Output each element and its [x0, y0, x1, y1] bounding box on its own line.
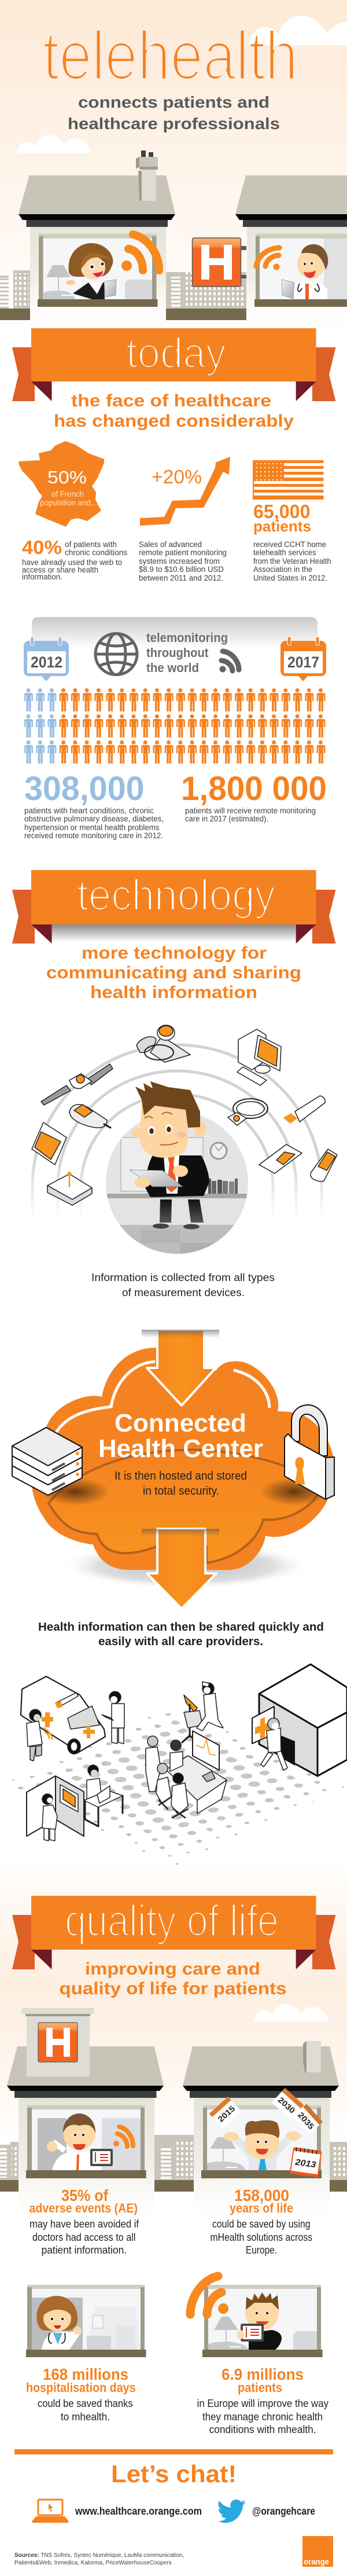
- sill: [201, 2170, 322, 2178]
- panel: lower city and ground: [0, 2135, 347, 2192]
- heading: quality of life: quality of life: [65, 1896, 279, 1946]
- lamp and sofa: [208, 2317, 317, 2350]
- calendar page 2030: 2030: [276, 2095, 297, 2115]
- caption on map: population and...: [40, 498, 97, 507]
- icon: calendar 2017: 2017: [287, 654, 319, 671]
- subheading: improving care: improving care and: [85, 1959, 260, 1979]
- stat text: mHealth solutions across: [211, 2231, 312, 2243]
- subheading: face of healthcare: [54, 391, 294, 431]
- stat text: systems increased from: [139, 557, 220, 566]
- sill: [38, 299, 157, 307]
- cloud front highlight: [49, 1450, 322, 1563]
- heading: telemonitoring: telemonitoring: [146, 630, 228, 645]
- stat: 6.9 millions: [222, 2365, 304, 2395]
- sill: [254, 299, 347, 307]
- panel: telemonitoring header: [24, 617, 326, 681]
- stat text: could be saved thanks: [38, 2397, 133, 2409]
- stat text: United States in 2012.: [253, 574, 327, 582]
- stat text: patients with heart conditions, chronic: [24, 806, 154, 815]
- stat text: [185, 806, 316, 823]
- roof with chimney: [183, 2041, 339, 2098]
- doctor: [282, 238, 347, 299]
- stat text: conditions with mhealth.: [209, 2423, 316, 2435]
- stat: 308,000: 308,000: [24, 770, 145, 808]
- woman with tablet: [66, 243, 116, 299]
- stat: 168 millions: 168 millions: [43, 2365, 128, 2383]
- sill: [26, 2350, 146, 2357]
- stat: US patients: [253, 460, 331, 582]
- heading: connected health center: [98, 1409, 263, 1463]
- stat text: hypertension or mental health problems: [24, 823, 160, 832]
- cloud white contour: [56, 1362, 270, 1433]
- map of France: [19, 441, 104, 527]
- device: usb key: [284, 1096, 325, 1123]
- stat text: doctors had access to all: [32, 2231, 135, 2243]
- subheading: more technology: more technology for: [82, 944, 267, 963]
- sill: [26, 2170, 146, 2178]
- meeting table with monitor: [166, 1731, 227, 1814]
- ribbon: technology: [12, 870, 335, 944]
- stat: 6.9 millions: patients: [238, 2380, 282, 2395]
- footer divider bar: [14, 2449, 333, 2454]
- doctor at booth: [42, 1794, 57, 1841]
- heading: today: today: [126, 330, 226, 377]
- illustration: care providers scene: [0, 1664, 347, 1867]
- stat: 158,000 years: [230, 2186, 293, 2215]
- stat text: patient information.: [42, 2244, 127, 2256]
- man with tablet: [130, 1081, 209, 1230]
- subtitle: [68, 93, 280, 133]
- roof: [235, 175, 347, 227]
- team at meeting: [146, 1736, 188, 1818]
- icon: rss signal: [113, 2127, 133, 2146]
- icon: rss signal small: [256, 248, 280, 270]
- stat text: obstructive pulmonary disease, diabetes,: [24, 814, 164, 823]
- caption: shared with care providers: easily with all care providers.: [98, 1635, 263, 1648]
- heading: connected health center: Health Center: [98, 1434, 263, 1463]
- subheading: face of healthcare: the face of healthcare: [71, 391, 271, 410]
- house: years of life stat: [183, 2041, 339, 2256]
- calendar page 2030: [272, 2088, 304, 2120]
- caption on map: of French: [51, 489, 84, 498]
- screen booth: [27, 1776, 84, 1836]
- panel: hospitalisation days: [26, 2285, 146, 2423]
- house: hospital stat: [7, 2008, 164, 2256]
- calendar page 2015: 2015: [216, 2104, 237, 2124]
- icon: rss signal: [121, 234, 159, 271]
- stat text: received remote monitoring care in 2012.: [24, 831, 163, 840]
- arrow chart: [140, 457, 230, 526]
- icon: hospital sign: [192, 238, 246, 287]
- ribbon: today: [12, 328, 335, 401]
- stat text: $8.9 to $10.6 billion USD: [139, 565, 224, 574]
- stat text: patients will receive remote monitoring: [185, 806, 316, 815]
- device: mobile phone: [259, 1144, 302, 1173]
- device: glucose meter: [69, 1104, 110, 1128]
- desk calendar 2013: 2013: [294, 2157, 317, 2170]
- wall: [19, 2098, 154, 2226]
- wall: [194, 2098, 330, 2226]
- figure 50%: 50%: [47, 467, 87, 487]
- panel: hero header: [17, 16, 347, 153]
- window: [256, 234, 347, 299]
- icon: calendar 2012: [24, 637, 69, 681]
- diagram: devices around a man: [32, 1025, 337, 1256]
- arrow down out: [142, 1529, 219, 1609]
- stat text: [139, 540, 227, 582]
- doctor with tablet: [47, 2113, 113, 2170]
- nurse with cart: [182, 1682, 223, 1742]
- cloud text: [115, 1470, 247, 1498]
- stat text: may have been avoided if: [29, 2218, 139, 2230]
- stat: adverse events: 35% of: [61, 2186, 109, 2204]
- logo: orange: orange: [304, 2557, 329, 2566]
- stat: 168 millions: [26, 2365, 136, 2395]
- subheading: more technology: health information: [90, 983, 257, 1002]
- office furniture: [87, 2307, 141, 2350]
- figure 65,000 patients: [253, 501, 311, 535]
- floor dot pattern: [0, 1705, 347, 1867]
- lamp and sofa: [43, 265, 152, 299]
- hospital tower: [22, 2008, 94, 2076]
- caption: information collected: [91, 1271, 275, 1298]
- figure 40%: 40%: [22, 537, 62, 558]
- twitter handle: @orangehcare: [252, 2505, 315, 2517]
- heading: let's chat: Let’s chat!: [111, 2460, 237, 2487]
- stat text: could be saved by using: [212, 2218, 310, 2230]
- heading: connected health center: Connected: [115, 1409, 246, 1437]
- cloud lower right: [253, 2004, 328, 2021]
- subheading: improving care: [59, 1959, 287, 1998]
- stat text: from the Veteran Health: [253, 557, 331, 566]
- icon: laptop: [32, 2500, 69, 2523]
- subheading: more technology: [46, 944, 301, 1002]
- cloud text: in total security.: [143, 1485, 219, 1498]
- device: tablet on cradle: [32, 1122, 67, 1165]
- ambulance: [21, 1676, 105, 1754]
- stat: 158,000 years: 158,000: [234, 2186, 289, 2204]
- calendar page 2015: [209, 2097, 241, 2129]
- calendar page 2035: [293, 2104, 323, 2134]
- subheading: face of healthcare: has changed considerably: [54, 412, 294, 431]
- subheading: improving care: quality of life for patients: [59, 1979, 287, 1998]
- stat text: access or share health: [22, 566, 98, 574]
- icon: calendar 2017: [280, 637, 326, 681]
- subtitle: healthcare professionals: [68, 115, 280, 133]
- icon: twitter bird: [218, 2500, 246, 2523]
- device: ecg necklace: [228, 1099, 268, 1125]
- cloud text: It is then hosted and stored: [115, 1470, 247, 1483]
- office circle: [106, 1111, 248, 1256]
- icon: globe: [95, 633, 137, 675]
- wall: [247, 227, 347, 326]
- stat text: [211, 2218, 312, 2256]
- house: doctor office: [235, 175, 347, 307]
- icon: US flag: [253, 460, 324, 500]
- stat: 308,000: [24, 770, 164, 840]
- device: blood pressure cuff: [136, 1025, 190, 1062]
- stat: adverse events: adverse events (AE): [29, 2201, 138, 2215]
- doctor at desk: [84, 1765, 123, 1826]
- lamp and sofa: [207, 2137, 246, 2170]
- wall: [30, 227, 166, 326]
- heading: telemonitoring: throughout: [146, 645, 209, 660]
- stat text: [24, 806, 164, 840]
- ribbon: quality of life: [12, 1896, 335, 1969]
- stat text: [29, 2218, 139, 2256]
- walking doctor: [261, 1718, 287, 1770]
- caption: information collected: Information is collected from all types: [91, 1271, 275, 1283]
- pictogram: people grid: [24, 688, 328, 764]
- stat: 1,800 000: 1,800 000: [181, 770, 327, 808]
- device: desktop computer: [237, 1029, 281, 1085]
- stat text: in Europe will improve the way: [197, 2397, 329, 2409]
- panel: 6.9 million patients: [190, 2276, 329, 2435]
- cloud left: [17, 135, 91, 153]
- stat text: received CCHT home: [253, 540, 326, 549]
- device: wireless router: [47, 1172, 92, 1205]
- woman at ambulance: [27, 1709, 52, 1761]
- subheading: more technology: communicating and sharing: [46, 963, 301, 982]
- logo: orange: [302, 2536, 333, 2567]
- panel: city and ground strip: [0, 270, 246, 320]
- icon: rss gray: [220, 651, 239, 673]
- arrow down in: [142, 1330, 219, 1406]
- heading: telemonitoring: the world: [146, 660, 199, 675]
- paramedic with laptop: [102, 1691, 124, 1744]
- stat text: [197, 2397, 329, 2435]
- stat: France 50%: [19, 441, 127, 581]
- man with tablet: [237, 2292, 282, 2350]
- hospital building: [252, 1664, 347, 1776]
- website link: www.healthcare.orange.com: [75, 2505, 202, 2517]
- window: [27, 2105, 145, 2170]
- stat: 158,000 years: years of life: [230, 2201, 293, 2215]
- figure +20%: +20%: [152, 466, 202, 487]
- figure 65,000 patients: 65,000: [253, 501, 310, 522]
- stat text: to mhealth.: [61, 2410, 110, 2423]
- stat text: chronic conditions: [65, 548, 127, 557]
- stat: adverse events: [29, 2186, 138, 2215]
- window: [203, 2105, 321, 2170]
- happy man arms raised: [224, 2120, 301, 2170]
- calendar page 2035: 2035: [296, 2110, 316, 2131]
- stat text: Sales of advanced: [139, 540, 202, 549]
- figure 65,000 patients: patients: [253, 518, 311, 535]
- caption: shared with care providers: [38, 1621, 324, 1648]
- caption: shared with care providers: Health information can then be shared quickly and: [38, 1621, 324, 1634]
- icon: hospital sign: [38, 2023, 77, 2062]
- stat text: [38, 2397, 133, 2423]
- woman doctor: [36, 2296, 82, 2350]
- device: smartphone: [311, 1149, 337, 1181]
- window: [204, 2285, 321, 2350]
- window: [39, 234, 156, 299]
- roof: [7, 2046, 164, 2098]
- stat text: [22, 540, 127, 581]
- stat text: care in 2017 (estimated).: [185, 814, 268, 823]
- stat text: Association in the: [253, 565, 312, 574]
- stat text: between 2011 and 2012.: [139, 574, 223, 582]
- caption: information collected: of measurement devices.: [122, 1286, 245, 1298]
- stat text: [253, 540, 331, 582]
- chimney: [136, 151, 158, 170]
- sources: [14, 2552, 184, 2566]
- heading: technology: technology: [77, 871, 275, 919]
- device: wrist monitor: [41, 1064, 113, 1105]
- stat text: they manage chronic health: [202, 2410, 323, 2423]
- house: patient home: [19, 151, 175, 307]
- signal arcs: [32, 1045, 322, 1219]
- stat: sales +20%: [139, 457, 230, 582]
- desk calendar 2013: [290, 2147, 322, 2177]
- stat text: Europe.: [246, 2244, 277, 2256]
- ground shadow: [60, 1543, 312, 1589]
- subtitle: connects patients and: [78, 93, 270, 111]
- stat: 168 millions: hospitalisation days: [26, 2380, 136, 2395]
- icon: calendar 2012: 2012: [31, 654, 62, 671]
- stat text: remote patient monitoring: [139, 548, 227, 557]
- sill: [202, 2350, 323, 2357]
- heading: telemonitoring: [146, 630, 228, 675]
- icon: padlock: [285, 1405, 334, 1499]
- stat text: information.: [22, 573, 62, 581]
- sources: Patients&Web, Inmedica, Kalorma, PriceWaterhouseCoopers: [14, 2559, 172, 2566]
- roof: [19, 170, 175, 227]
- cloud top right: [248, 16, 347, 45]
- caption on map: [40, 489, 97, 507]
- stat: 6.9 millions: 6.9 millions: [222, 2365, 304, 2383]
- sources: Sources: TNS Sofres, Syntec Numérique, LauMa communication,: [14, 2552, 184, 2559]
- window: [27, 2285, 145, 2350]
- title: telehealth: [43, 17, 298, 94]
- stat text: have already used the web to: [22, 558, 122, 567]
- cloud shape: [31, 1348, 335, 1570]
- stat text: telehealth services: [253, 548, 316, 557]
- icon: rss signal: [190, 2276, 228, 2314]
- icon: server stack: [12, 1428, 82, 1495]
- dark shadows: [40, 1478, 110, 1506]
- diagram: connected health cloud: [12, 1330, 335, 1609]
- stat text: of patients with: [65, 540, 117, 549]
- stat: 1,800 000: [181, 770, 327, 823]
